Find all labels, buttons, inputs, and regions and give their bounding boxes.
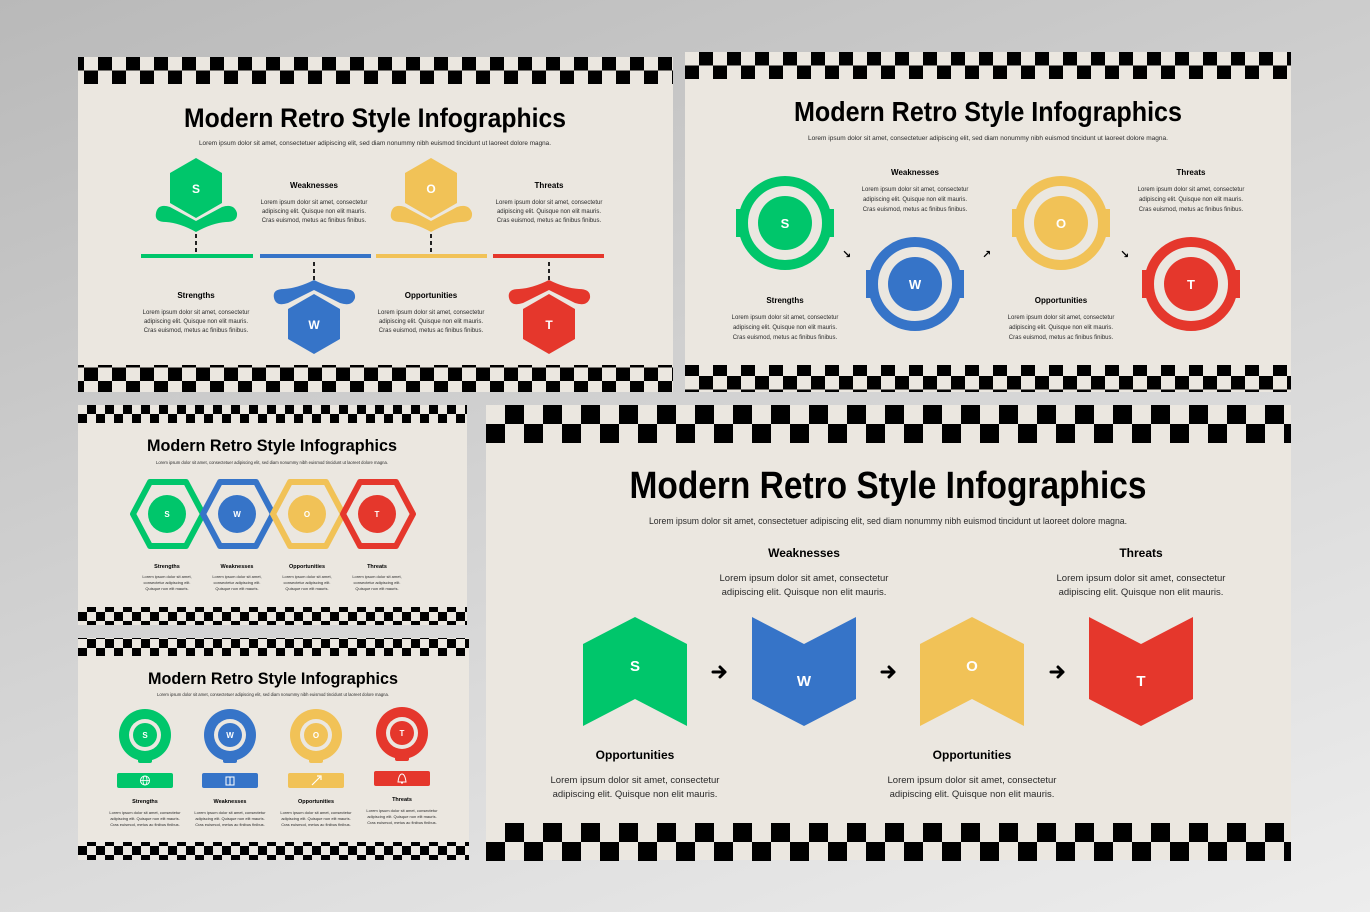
labels: Cras euismod, metus ac finibus finibus. [281, 822, 351, 827]
text: weaknesses: adipiscing elit. Quisque non elit mauris. [722, 587, 886, 598]
icon: T hexagon: T [545, 318, 553, 332]
labels: Strengths [132, 799, 158, 805]
text: threats [496, 181, 602, 224]
icon: S ring: S [781, 216, 790, 231]
text: opportunities right: Opportunities [933, 748, 1012, 762]
text: threats: Lorem ipsum dolor sit amet, consectetur [496, 200, 602, 206]
pins: O [313, 731, 319, 740]
panel: slide 2 rings [685, 52, 1291, 392]
hexagon chain [133, 482, 413, 546]
pins [119, 707, 428, 763]
arrows [842, 248, 1129, 261]
labels row: Quisque non elit mauris. [355, 586, 399, 591]
icon: S hexagon [156, 158, 237, 252]
text: weaknesses: Cras euismod, metus ac finibus finibus. [863, 207, 968, 213]
text: strengths: Strengths [766, 296, 804, 305]
subtitle: Lorem ipsum dolor sit amet, consectetuer adipiscing elit, sed diam nonummy nibh euismod tincidunt ut laoreet dolore magna. [199, 141, 551, 147]
text: weaknesses: adipiscing elit. Quisque non elit mauris. [863, 197, 967, 203]
text: strengths: Cras euismod, metus ac finibus finibus. [733, 335, 838, 341]
text: threats [1057, 546, 1225, 598]
icon: O banner [920, 617, 1024, 726]
text: weaknesses: Cras euismod, metus ac finibus finibus. [262, 218, 367, 224]
text: weaknesses [862, 168, 968, 213]
hexagon chain: T [375, 510, 380, 519]
title: Modern Retro Style Infographics [148, 669, 398, 688]
labels row: consectetur adipiscing elit. [214, 580, 260, 585]
icon: W ring: W [909, 277, 922, 292]
labels row: Quisque non elit mauris. [285, 586, 329, 591]
icon: W ring [866, 242, 964, 326]
text: threats: Cras euismod, metus ac finibus finibus. [497, 218, 602, 224]
text: weaknesses [261, 181, 367, 224]
text: threats: Threats [535, 181, 564, 190]
text: opportunities left: Lorem ipsum dolor sit amet, consectetur [551, 775, 719, 786]
text: threats: adipiscing elit. Quisque non elit mauris. [497, 209, 601, 215]
icon: W banner: W [797, 673, 812, 690]
labels: Cras euismod, metus ac finibus finibus. [110, 822, 180, 827]
arrows: ↗ [982, 248, 991, 261]
icon: T hexagon [509, 262, 590, 354]
text: opportunities right [888, 748, 1056, 800]
subtitle: Lorem ipsum dolor sit amet, consectetuer adipiscing elit, sed diam nonummy nibh euismod tincidunt ut laoreet dolore magna. [808, 136, 1168, 142]
labels: Lorem ipsum dolor sit amet, consectetur [109, 810, 181, 815]
subtitle: Lorem ipsum dolor sit amet, consectetuer adipiscing elit, sed diam nonummy nibh euismod tincidunt ut laoreet dolore magna. [156, 460, 388, 465]
labels: Lorem ipsum dolor sit amet, consectetur [194, 810, 266, 815]
text: opportunities: Lorem ipsum dolor sit amet, consectetur [378, 310, 484, 316]
labels row: Lorem ipsum dolor sit amet, [352, 574, 402, 579]
icon: O hexagon [391, 158, 472, 252]
arrows [713, 667, 1063, 677]
text: opportunities: Cras euismod, metus ac finibus finibus. [379, 328, 484, 334]
text: strengths [143, 291, 249, 334]
icon: S ring [736, 181, 834, 265]
panel: slide 4 pins [78, 638, 469, 860]
text: strengths: adipiscing elit. Quisque non elit mauris. [144, 319, 248, 325]
labels: Lorem ipsum dolor sit amet, consectetur [280, 810, 352, 815]
labels row [142, 564, 402, 591]
labels row: Lorem ipsum dolor sit amet, [142, 574, 192, 579]
text: weaknesses: Lorem ipsum dolor sit amet, consectetur [862, 187, 968, 193]
labels: Cras euismod, metus ac finibus finibus. [367, 820, 437, 825]
icon: W banner [752, 617, 856, 726]
panel: slide 3 hexagon chain [78, 405, 467, 625]
labels: Threats [392, 797, 412, 803]
text: opportunities left: adipiscing elit. Quisque non elit mauris. [553, 789, 717, 800]
labels row: consectetur adipiscing elit. [354, 580, 400, 585]
text: strengths: Lorem ipsum dolor sit amet, consectetur [143, 310, 249, 316]
labels row: consectetur adipiscing elit. [284, 580, 330, 585]
text: threats: Cras euismod, metus ac finibus finibus. [1139, 207, 1244, 213]
icon: T ring [1142, 242, 1240, 326]
labels: adipiscing elit. Quisque non elit mauris. [110, 816, 180, 821]
hexagon chain: W [233, 510, 241, 519]
labels row: Lorem ipsum dolor sit amet, [212, 574, 262, 579]
panel: slide 1 hexagon timeline [78, 57, 673, 392]
labels row: Strengths [154, 564, 180, 570]
text: threats: Threats [1119, 546, 1163, 560]
icon: T banner [1089, 617, 1193, 726]
icon: O ring: O [1056, 216, 1066, 231]
labels: adipiscing elit. Quisque non elit mauris. [281, 816, 351, 821]
icon: T ring: T [1187, 277, 1195, 292]
labels row: Opportunities [289, 564, 325, 570]
title: Modern Retro Style Infographics [184, 103, 566, 133]
text: threats [1138, 168, 1244, 213]
text: opportunities: adipiscing elit. Quisque non elit mauris. [379, 319, 483, 325]
labels: Opportunities [298, 799, 334, 805]
text: threats: Lorem ipsum dolor sit amet, consectetur [1057, 573, 1225, 584]
pins: W [226, 731, 234, 740]
text: weaknesses [720, 546, 888, 598]
labels row: Threats [367, 564, 387, 570]
icon: W hexagon: W [308, 318, 320, 332]
title: Modern Retro Style Infographics [794, 96, 1182, 127]
text: threats: Lorem ipsum dolor sit amet, consectetur [1138, 187, 1244, 193]
text: threats: adipiscing elit. Quisque non elit mauris. [1059, 587, 1223, 598]
text: opportunities: adipiscing elit. Quisque non elit mauris. [1009, 325, 1113, 331]
labels row: Quisque non elit mauris. [215, 586, 259, 591]
text: threats: Threats [1177, 168, 1206, 177]
text: opportunities: Cras euismod, metus ac finibus finibus. [1009, 335, 1114, 341]
hexagon chain: O [304, 510, 310, 519]
labels: Lorem ipsum dolor sit amet, consectetur [366, 808, 438, 813]
subtitle: Lorem ipsum dolor sit amet, consectetuer adipiscing elit, sed diam nonummy nibh euismod tincidunt ut laoreet dolore magna. [157, 692, 389, 697]
arrows: ↘ [842, 248, 851, 261]
labels: adipiscing elit. Quisque non elit mauris. [195, 816, 265, 821]
text: opportunities right: Lorem ipsum dolor sit amet, consectetur [888, 775, 1056, 786]
icon: O banner: O [966, 658, 978, 675]
labels row: Quisque non elit mauris. [145, 586, 189, 591]
labels [109, 797, 438, 827]
hexagon chain: S [164, 510, 170, 519]
icon: O hexagon: O [426, 182, 436, 196]
arrows: ↘ [1120, 248, 1129, 261]
text: opportunities left: Opportunities [596, 748, 675, 762]
text: weaknesses: Weaknesses [290, 181, 338, 190]
icon: O ring [1012, 181, 1110, 265]
icon bars [117, 771, 430, 788]
icon: S banner [583, 617, 687, 726]
text: strengths: Strengths [177, 291, 215, 300]
text: weaknesses: Lorem ipsum dolor sit amet, consectetur [261, 200, 367, 206]
text: opportunities left [551, 748, 719, 800]
text: weaknesses: Lorem ipsum dolor sit amet, consectetur [720, 573, 888, 584]
labels: Cras euismod, metus ac finibus finibus. [195, 822, 265, 827]
pins: S [142, 731, 148, 740]
text: opportunities: Opportunities [405, 291, 458, 300]
text: strengths: Lorem ipsum dolor sit amet, consectetur [732, 315, 838, 321]
text: weaknesses: Weaknesses [891, 168, 939, 177]
labels: Weaknesses [214, 799, 246, 805]
timeline bars [141, 254, 604, 258]
title: Modern Retro Style Infographics [630, 465, 1146, 507]
pins: T [400, 729, 405, 738]
icon: S banner: S [630, 658, 640, 675]
text: strengths [732, 296, 838, 341]
icon: S hexagon: S [192, 182, 200, 196]
title: Modern Retro Style Infographics [147, 436, 397, 455]
text: weaknesses: Weaknesses [768, 546, 840, 560]
icon: W hexagon [274, 262, 355, 354]
icon: T banner: T [1136, 673, 1146, 690]
text: opportunities [378, 291, 484, 334]
subtitle: Lorem ipsum dolor sit amet, consectetuer adipiscing elit, sed diam nonummy nibh euismod tincidunt ut laoreet dolore magna. [649, 516, 1127, 526]
text: weaknesses: adipiscing elit. Quisque non elit mauris. [262, 209, 366, 215]
text: opportunities: Opportunities [1035, 296, 1088, 305]
labels row: Lorem ipsum dolor sit amet, [282, 574, 332, 579]
labels row: consectetur adipiscing elit. [144, 580, 190, 585]
text: threats: adipiscing elit. Quisque non elit mauris. [1139, 197, 1243, 203]
panel: slide 5 banners [486, 405, 1291, 861]
labels row: Weaknesses [221, 564, 253, 570]
text: strengths: Cras euismod, metus ac finibus finibus. [144, 328, 249, 334]
text: strengths: adipiscing elit. Quisque non elit mauris. [733, 325, 837, 331]
labels: adipiscing elit. Quisque non elit mauris. [367, 814, 437, 819]
text: opportunities [1008, 296, 1114, 341]
text: opportunities right: adipiscing elit. Quisque non elit mauris. [890, 789, 1054, 800]
text: opportunities: Lorem ipsum dolor sit amet, consectetur [1008, 315, 1114, 321]
